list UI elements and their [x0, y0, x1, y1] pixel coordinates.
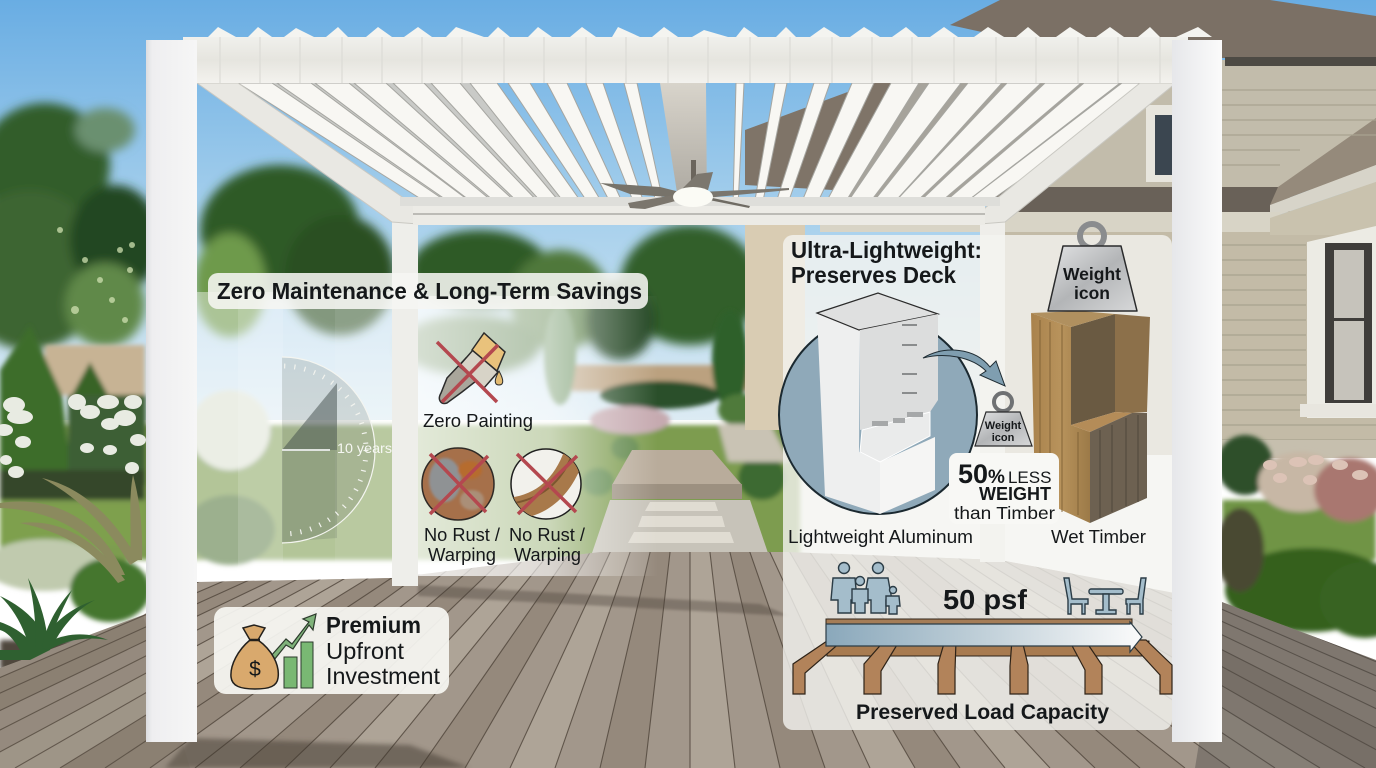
label: Wet Timber: Wet Timber	[1051, 526, 1146, 547]
background: sky	[0, 0, 1376, 420]
background: trees and garden	[0, 103, 800, 670]
heading: Ultra-Lightweight: Preserves Deck	[791, 262, 956, 288]
foreground plants left	[0, 475, 142, 660]
big weight icon	[1048, 224, 1137, 311]
clock label: 10 years	[337, 440, 392, 456]
slat backing shadow	[238, 83, 570, 206]
big weight icon: Weight	[1063, 264, 1121, 284]
small weight icon: icon	[992, 432, 1015, 444]
fog overlay right	[418, 296, 658, 576]
background: flower beds and shrubs right	[1216, 435, 1376, 638]
text: Premium Upfront Investment	[326, 612, 441, 689]
siding lines	[1222, 90, 1376, 440]
icon: crossed out paintbrush	[437, 333, 505, 403]
slats left	[238, 83, 664, 206]
ceiling fan	[600, 160, 789, 209]
central support beam	[660, 83, 707, 212]
text: Premium Upfront Investment: Upfront	[326, 638, 405, 664]
icon: family	[831, 562, 900, 614]
text: Premium Upfront Investment: Premium	[326, 612, 421, 638]
pergola louvered roof	[197, 83, 1176, 225]
label: No Rust / Warping right: No Rust /	[509, 524, 586, 545]
big weight icon: icon	[1074, 283, 1110, 303]
deck joist diagram	[793, 619, 1172, 694]
background: house	[745, 0, 1376, 458]
label: Preserved Load Capacity: Preserved Load Capacity	[856, 700, 1109, 724]
heading: Ultra-Lightweight: Ultra-Lightweight:	[791, 237, 982, 263]
back beam	[400, 197, 1000, 206]
front posts	[146, 40, 1222, 742]
clock: 10 years	[282, 356, 392, 544]
text: Premium Upfront Investment: Investment	[326, 663, 441, 689]
hydrangea blooms left	[0, 394, 146, 478]
deck board	[826, 619, 1132, 625]
panel: premium upfront investment	[214, 607, 449, 694]
fog overlay left	[197, 292, 392, 578]
label: Zero Painting: Zero Painting	[423, 410, 533, 431]
load arrow	[826, 622, 1142, 652]
callout: 50% less weight: WEIGHT	[979, 484, 1051, 504]
value: 50 psf: 50 psf	[943, 584, 1028, 615]
heading chip: Zero Maintenance	[208, 273, 648, 309]
panel: ultra-lightweight	[779, 224, 1172, 730]
background: wooden deck	[0, 552, 1376, 768]
label: No Rust / Warping left: No Rust /	[424, 524, 501, 545]
side rails	[197, 83, 418, 224]
icon: money bag with rising chart	[231, 614, 316, 689]
callout: 50% less weight: than Timber	[954, 503, 1055, 523]
callout: 50% less weight: 50%LESS	[958, 459, 1051, 489]
small weight icon: Weight	[985, 420, 1022, 432]
icon: no warping	[510, 448, 582, 520]
label: No Rust / Warping right: Warping	[514, 544, 581, 565]
back posts	[392, 222, 1005, 586]
wet timber block	[1031, 311, 1150, 523]
icon: table and chairs	[1064, 578, 1146, 614]
callout: 50% less weight	[949, 453, 1059, 524]
aluminum post in circle	[779, 293, 977, 514]
icon: money bag with rising chart: $	[249, 658, 261, 681]
label: No Rust / Warping left: Warping	[428, 544, 496, 565]
small weight icon	[975, 393, 1032, 446]
heading: Ultra-Lightweight	[791, 237, 982, 288]
heading chip: Zero Maintenance: Zero Maintenance & Long-Term Savings	[217, 278, 642, 304]
louver tips along the top	[208, 27, 1212, 37]
label: No Rust / Warping left	[424, 524, 501, 565]
arrow: curved to weight	[923, 350, 1005, 386]
front beam	[183, 27, 1212, 83]
icon: no rust	[422, 448, 494, 520]
bokeh highlights in tree	[57, 227, 135, 323]
slats right	[733, 83, 1158, 206]
path stones	[612, 450, 742, 485]
label: Lightweight Aluminum: Lightweight Aluminum	[788, 526, 973, 547]
label: No Rust / Warping right	[509, 524, 586, 565]
